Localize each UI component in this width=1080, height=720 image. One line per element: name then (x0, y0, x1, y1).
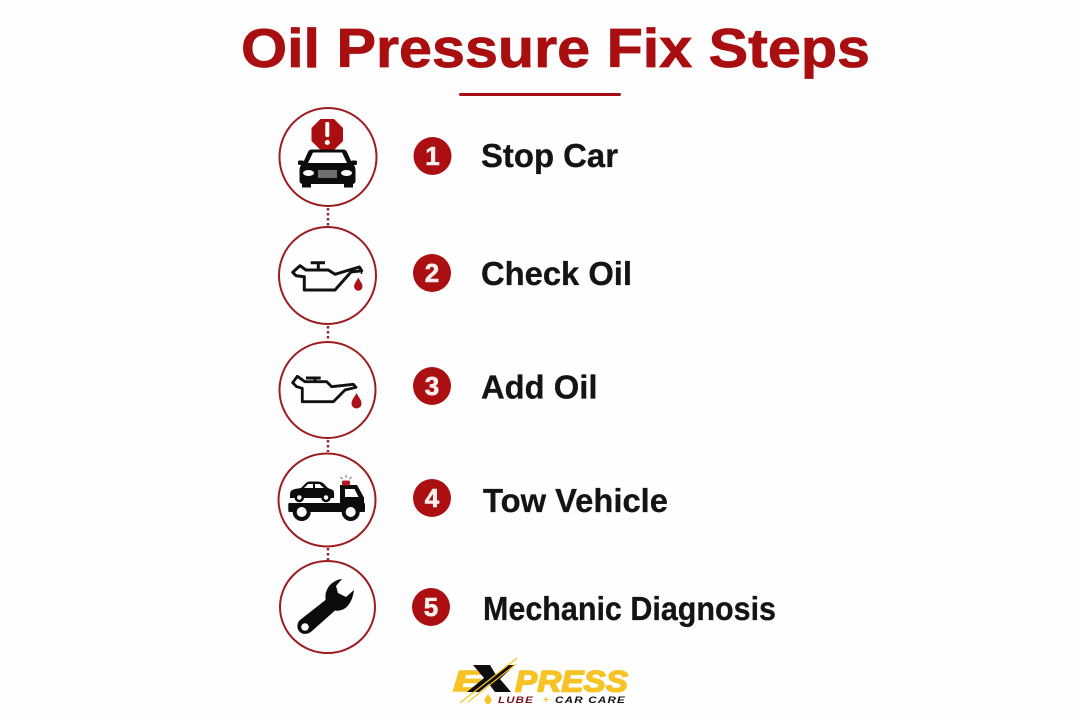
step 1 icon: stopped car with warning (280, 108, 376, 206)
number badge 3: 3 (425, 371, 439, 401)
label: Check Oil: Check Oil (481, 255, 632, 292)
step 5 icon: wrench (280, 561, 375, 653)
connector dots 2-3 (327, 326, 329, 341)
step 4 label (413, 479, 668, 519)
step 2 icon: oil can with drop (279, 227, 376, 324)
step 2 label (413, 254, 632, 292)
label: Add Oil: Add Oil (481, 368, 598, 406)
connector dots 4-5 (327, 548, 329, 560)
connector dots 1-2 (327, 208, 329, 226)
logo tagline: LUBE (498, 695, 534, 706)
label: Mechanic Diagnosis: Mechanic Diagnosis (483, 590, 776, 627)
number badge 5 (412, 588, 450, 626)
logo letter E: E (453, 666, 486, 698)
logo drop icon (484, 694, 492, 704)
connector dots 3-4 (327, 440, 329, 452)
number badge 2: 2 (425, 258, 439, 288)
step 1 label (414, 137, 618, 175)
logo tagline car care: CAR CARE (555, 695, 626, 706)
logo plus sign: + (543, 695, 549, 706)
number badge 1 (414, 137, 452, 175)
step 5 label (412, 588, 776, 627)
number badge 3 (413, 367, 451, 405)
logo word PRESS: PRESS (515, 666, 628, 698)
step 3 label (413, 367, 598, 406)
number badge 1: 1 (425, 141, 440, 171)
logo letter X (467, 665, 515, 692)
number badge 2 (413, 254, 451, 292)
number badge 4: 4 (425, 483, 440, 513)
step 3 icon: adding oil (280, 342, 376, 438)
logo: Express Lube + Car Care (453, 658, 628, 706)
number badge 5: 5 (424, 592, 438, 622)
label: Stop Car: Stop Car (481, 137, 618, 174)
title underline (459, 93, 621, 96)
label: Tow Vehicle: Tow Vehicle (483, 482, 668, 519)
title: Oil Pressure Fix Steps (241, 17, 870, 79)
step 4 icon: tow truck (278, 454, 376, 546)
number badge 4 (413, 479, 451, 517)
